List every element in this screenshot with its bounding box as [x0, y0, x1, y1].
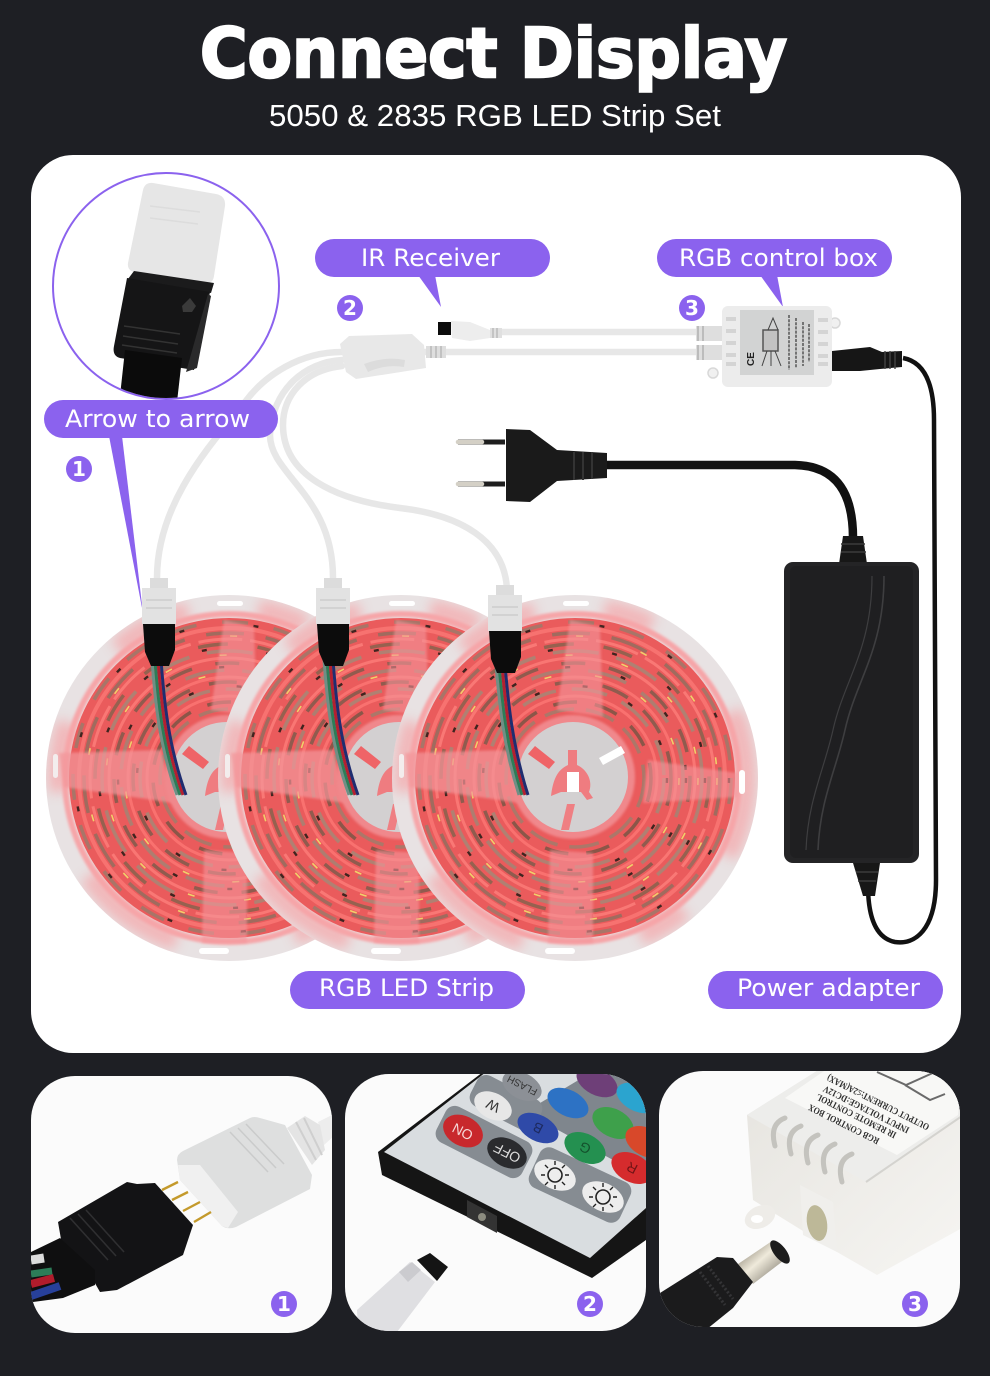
remote buttons: G — [577, 1138, 593, 1158]
DC socket — [744, 1205, 835, 1251]
remote buttons: B — [530, 1119, 546, 1137]
callout: RGB control box: RGB control box — [679, 244, 878, 272]
callout: arrow to arrow: Arrow to arrow — [65, 405, 250, 433]
number badge 3 — [679, 295, 705, 321]
power adapter — [784, 536, 919, 896]
number badge 3 — [902, 1291, 928, 1317]
remote buttons: W — [483, 1096, 503, 1116]
number badge 2 — [577, 1291, 603, 1317]
callout: IR receiver: IR Receiver — [361, 244, 500, 272]
inset circle: arrow connector — [53, 173, 279, 402]
number badge 3: 3 — [685, 296, 699, 320]
cable splitter — [340, 334, 446, 379]
number badge 2: 2 — [583, 1292, 597, 1316]
DC plug — [660, 1237, 793, 1329]
remote buttons — [443, 1074, 646, 1213]
callout: arrow to arrow — [44, 400, 278, 613]
RGB control box: CE — [746, 352, 757, 366]
remote body — [378, 1072, 646, 1278]
remote buttons: FLASH — [506, 1072, 540, 1097]
RGB wires — [152, 660, 528, 795]
title: Connect Display — [200, 14, 787, 94]
white female connector — [177, 1114, 334, 1228]
label text: OUTPUT CURRENT:≤2A(MAX) — [825, 1072, 931, 1132]
number badge 1: 1 — [72, 457, 86, 481]
label: power adapter — [708, 971, 943, 1009]
subtitle: 5050 & 2835 RGB LED Strip Set — [269, 98, 721, 133]
panel 3: control box detail — [659, 1069, 962, 1329]
vents — [773, 1118, 852, 1182]
number badge 1: 1 — [277, 1292, 291, 1316]
white splitter cables — [157, 332, 702, 590]
panel 1: connector detail — [31, 1076, 334, 1333]
label text: IR REMOTE CONTROL — [815, 1091, 898, 1139]
RGB connector 2 — [316, 578, 350, 666]
label: RGB LED strip — [290, 971, 525, 1009]
callout: RGB control box — [657, 239, 892, 307]
reel 2 — [218, 595, 584, 961]
panel: connection diagram — [31, 155, 961, 1053]
number badge 1 — [271, 1291, 297, 1317]
RGB connector 1 — [142, 578, 176, 666]
reel 3 — [392, 595, 758, 961]
IR plug — [357, 1253, 448, 1332]
black male connector — [31, 1182, 193, 1302]
label: power adapter: Power adapter — [737, 974, 920, 1002]
RGB control box — [696, 306, 840, 387]
panel 2: remote control detail — [345, 1074, 646, 1331]
DC jack and power cable — [832, 347, 936, 942]
label text: RGB CONTROL BOX — [807, 1101, 881, 1145]
LED strip reels — [46, 595, 758, 961]
remote buttons: OFF — [491, 1140, 523, 1166]
IR receiver plug — [438, 321, 502, 341]
remote buttons: R — [624, 1159, 640, 1177]
number badge 1 — [66, 456, 92, 482]
callout: IR receiver — [315, 239, 550, 307]
EU power plug — [458, 429, 853, 538]
label text — [807, 1072, 945, 1145]
RGB connector 3 — [488, 585, 522, 673]
label: RGB LED strip: RGB LED Strip — [319, 974, 494, 1002]
number badge 2: 2 — [343, 296, 357, 320]
box body — [747, 1069, 962, 1275]
number badge 3: 3 — [908, 1292, 922, 1316]
button panels — [540, 1074, 646, 1161]
label text: INPUT VOLTAGE:DC12V — [822, 1083, 911, 1134]
reel 1 — [46, 595, 412, 961]
gold pins — [162, 1182, 211, 1222]
number badge 2 — [337, 295, 363, 321]
remote buttons: ON — [450, 1120, 476, 1144]
